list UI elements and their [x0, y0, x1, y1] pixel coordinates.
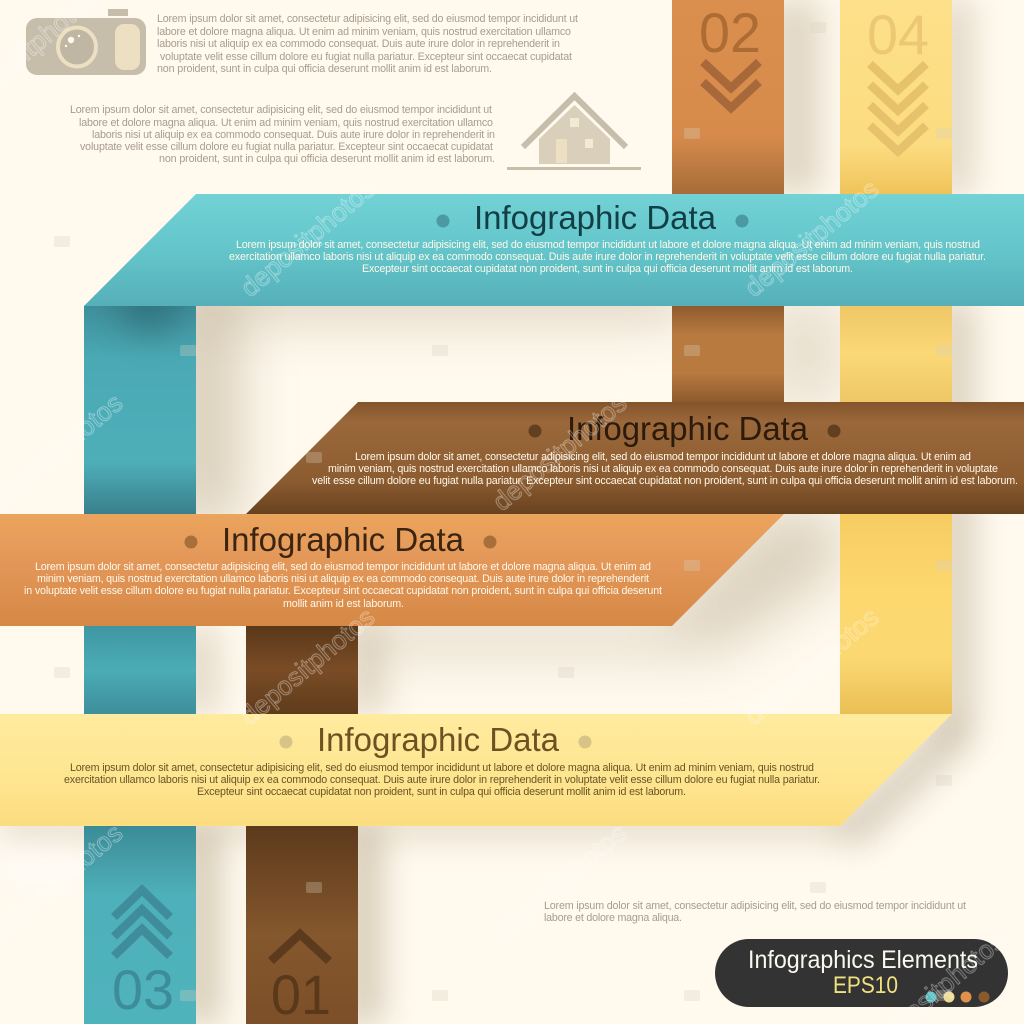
panel: orange band	[0, 514, 784, 626]
heading: Infographic Data	[567, 410, 809, 447]
text block: left of house: non proident, sunt in culpa qui officia deserunt mollit anim id est laborum.	[159, 153, 495, 165]
icon: double down chevron	[703, 62, 759, 108]
number 01 with chevron	[271, 934, 331, 1024]
icon: triple up chevron	[114, 890, 170, 956]
badge: infographics elements: EPS10	[833, 972, 898, 999]
icon: quadruple down chevron	[870, 64, 926, 152]
text block: top right of camera	[157, 13, 578, 75]
badge: infographics elements: Infographics Elements	[748, 946, 978, 974]
body text: Excepteur sint occaecat cupidatat non proident, sunt in culpa qui officia deserunt mollit anim id est laborum.	[362, 263, 853, 275]
badge: infographics elements	[715, 939, 1008, 1007]
bullet dots	[184, 536, 496, 548]
watermark: depositphotos	[487, 818, 632, 947]
panel: yellow band	[0, 714, 952, 826]
text block: left of house: voluptate velit esse cillum dolore eu fugiat nulla pariatur. Excepteur sint occaecat cupidatat	[80, 141, 493, 153]
text block: top right of camera: laboris nisi ut aliquip ex ea commodo consequat. Duis aute irure dolor in reprehenderit in	[157, 38, 560, 50]
body text: minim veniam, quis nostrud exercitation ullamco laboris nisi ut aliquip ex ea commodo consequat. Duis aute irure dolor in reprehenderit in voluptate	[328, 463, 998, 475]
body text	[229, 239, 986, 275]
teal ribbon lower segments	[84, 266, 196, 1024]
number 02 with chevrons: 02	[699, 1, 761, 64]
text block: left of house	[70, 104, 495, 165]
number 04 with chevrons	[867, 3, 929, 152]
body text: Lorem ipsum dolor sit amet, consectetur adipisicing elit, sed do eiusmod tempor incididunt ut labore et dolore magna aliqua. Ut enim ad minim veniam, quis nostrud	[236, 239, 980, 251]
number 04 with chevrons: 04	[867, 3, 929, 66]
text block: top right of camera: non proident, sunt in culpa qui officia deserunt mollit anim id est laborum.	[157, 63, 492, 75]
icon: single up chevron	[271, 934, 329, 961]
number 03 with chevrons: 03	[112, 958, 174, 1021]
body text: Lorem ipsum dolor sit amet, consectetur adipisicing elit, sed do eiusmod tempor incididunt ut labore et dolore magna aliqua. Ut enim ad minim veniam, quis nostrud	[70, 762, 814, 774]
panel: teal band	[84, 194, 1024, 306]
text block: left of house: laboris nisi ut aliquip ex ea commodo consequat. Duis aute irure dolor in reprehenderit in	[92, 129, 495, 141]
number 03 with chevrons	[112, 890, 174, 1021]
body text: Excepteur sint occaecat cupidatat non proident, sunt in culpa qui officia deserunt mollit anim id est laborum.	[197, 786, 686, 798]
body text: minim veniam, quis nostrud exercitation ullamco laboris nisi ut aliquip ex ea commodo consequat. Duis aute irure dolor in reprehenderit	[37, 573, 649, 585]
body text: Lorem ipsum dolor sit amet, consectetur adipisicing elit, sed do eiusmod tempor incididunt ut labore et dolore magna aliqua. Ut enim ad	[35, 561, 651, 573]
text block: left of house: labore et dolore magna aliqua. Ut enim ad minim veniam, quis nostrud exercitation ullamco	[79, 117, 493, 129]
text block: left of house: Lorem ipsum dolor sit amet, consectetur adipisicing elit, sed do eiusmod tempor incididunt ut	[70, 104, 492, 116]
body text: exercitation ullamco laboris nisi ut aliquip ex ea commodo consequat. Duis aute irure dolor in reprehenderit in voluptate velit esse cillum dolore eu fugiat nulla pariatur.	[64, 774, 820, 786]
body text: velit esse cillum dolore eu fugiat nulla pariatur. Excepteur sint occaecat cupidatat non proident, sunt in culpa qui officia deserunt mollit anim id est laborum.	[312, 475, 1018, 487]
body text: exercitation ullamco laboris nisi ut aliquip ex ea commodo consequat. Duis aute irure dolor in reprehenderit in voluptate velit esse cillum dolore eu fugiat nulla pariatur.	[229, 251, 986, 263]
text block: top right of camera: voluptate velit esse cillum dolore eu fugiat nulla pariatur. Excepteur sint occaecat cupidatat	[160, 51, 572, 63]
heading: Infographic Data	[222, 521, 465, 558]
heading: Infographic Data	[317, 721, 560, 758]
text block: top right of camera: labore et dolore magna aliqua. Ut enim ad minim veniam, quis nostrud exercitation ullamco	[157, 26, 571, 38]
bullet dots	[436, 214, 748, 228]
body text: mollit anim id est laborum.	[283, 598, 404, 610]
watermark: depositphotos	[235, 174, 380, 303]
panel: brown band	[246, 402, 1024, 514]
text block: top right of camera: Lorem ipsum dolor sit amet, consectetur adipisicing elit, sed do eiusmod tempor incididunt ut	[157, 13, 578, 25]
icon: house	[507, 96, 641, 170]
body text	[312, 451, 1018, 487]
brown ribbon lower segments	[246, 626, 358, 1024]
body text: in voluptate velit esse cillum dolore eu fugiat nulla pariatur. Excepteur sint occaecat cupidatat non proident, sunt in culpa qui officia deserunt	[24, 585, 662, 597]
watermark: depositphotos	[739, 174, 884, 303]
body text	[24, 561, 662, 610]
bullet dots	[528, 424, 840, 438]
text block: bottom: labore et dolore magna aliqua.	[544, 912, 682, 924]
body text	[64, 762, 820, 798]
watermark: depositphotos	[487, 388, 632, 517]
heading: Infographic Data	[474, 199, 717, 236]
icon: camera	[26, 9, 146, 75]
text block: bottom	[544, 900, 966, 924]
yellow ribbon column	[840, 0, 952, 714]
number 02 with chevrons	[699, 1, 761, 108]
body text: Lorem ipsum dolor sit amet, consectetur adipisicing elit, sed do eiusmod tempor incididunt ut labore et dolore magna aliqua. Ut enim ad	[355, 451, 971, 463]
watermark: depositphotos	[235, 602, 380, 731]
bullet dots	[280, 736, 592, 748]
colour dots	[926, 992, 990, 1002]
orange ribbon column	[672, 0, 784, 402]
text block: bottom: Lorem ipsum dolor sit amet, consectetur adipisicing elit, sed do eiusmod tempor incididunt ut	[544, 900, 966, 912]
watermark: depositphotos	[739, 602, 884, 731]
